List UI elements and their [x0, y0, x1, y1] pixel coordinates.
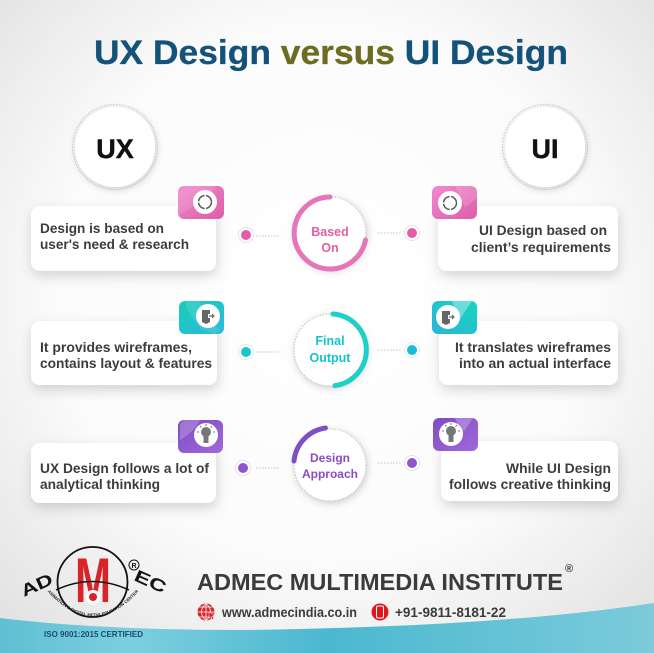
icon: UI door badge [432, 301, 477, 334]
icon: UX door badge [179, 301, 224, 334]
center circle: final output [294, 314, 366, 386]
center circle: based on: On [321, 241, 339, 255]
panel: UX based on: user's need & research [40, 237, 189, 252]
center circle: design approach: Design [310, 451, 350, 465]
icon: UI refresh badge [432, 186, 477, 219]
panel: UX final output: It provides wireframes, [40, 340, 192, 355]
logo: ADMEC: AD [18, 570, 56, 601]
UX badge circle [72, 104, 158, 190]
bottom teal wave [0, 603, 654, 653]
logo: ADMEC: ANIMATION & DIGITAL MEDIA EDUCATION CENTER [48, 590, 138, 616]
connector: based on [238, 226, 420, 242]
phone number: +91-9811-8181-22 [395, 605, 506, 620]
icon: UI bulb badge [433, 418, 478, 451]
ISO certification: ISO 9001:2015 CERTIFIED [44, 629, 143, 639]
icon: globe [198, 604, 215, 620]
UI badge circle: UI [532, 134, 558, 164]
panel: UI design approach: follows creative thinking [449, 477, 611, 492]
panel: UX based on [31, 186, 224, 271]
panel: UI based on: client’s requirements [471, 240, 611, 255]
UI badge circle [502, 104, 588, 190]
center circle: based on [294, 197, 366, 269]
panel: UX based on: Design is based on [40, 221, 164, 236]
UX badge circle: UX [96, 134, 134, 164]
logo: ADMEC: EC [131, 566, 169, 597]
center circle: design approach [294, 428, 366, 501]
panel: UI based on [432, 186, 618, 271]
logo: ADMEC: M [75, 546, 111, 616]
center circle: final output: Output [310, 351, 351, 365]
icon: UX refresh badge [178, 186, 224, 219]
center circle: final output: Final [315, 334, 345, 348]
panel: UX final output: contains layout & features [40, 356, 212, 371]
panel: UI design approach [433, 418, 618, 501]
icon: phone [372, 604, 388, 620]
institute name: ADMEC MULTIMEDIA INSTITUTE [197, 569, 563, 595]
panel: UI design approach: While UI Design [506, 461, 611, 476]
panel: UI final output: into an actual interface [459, 356, 611, 371]
icon: UX bulb badge [178, 420, 223, 453]
website: www.admecindia.co.in [221, 605, 357, 620]
registered mark: ® [565, 563, 573, 575]
logo: ADMEC: R [131, 563, 137, 570]
logo: ADMEC [18, 546, 169, 618]
panel: UX design approach: UX Design follows a lot of [40, 461, 210, 476]
panel: UI final output [432, 301, 618, 385]
panel: UX final output [31, 301, 224, 385]
center circle: based on: Based [311, 225, 349, 239]
title: UX Design versus UI Design [94, 34, 568, 72]
panel: UI final output: It translates wireframes [455, 340, 611, 355]
panel: UI based on: UI Design based on [479, 223, 607, 238]
panel: UX design approach [31, 420, 223, 503]
panel: UX design approach: analytical thinking [40, 477, 160, 492]
connector: final output [238, 342, 420, 360]
connector: design approach [236, 456, 420, 476]
center circle: design approach: Approach [302, 467, 358, 481]
